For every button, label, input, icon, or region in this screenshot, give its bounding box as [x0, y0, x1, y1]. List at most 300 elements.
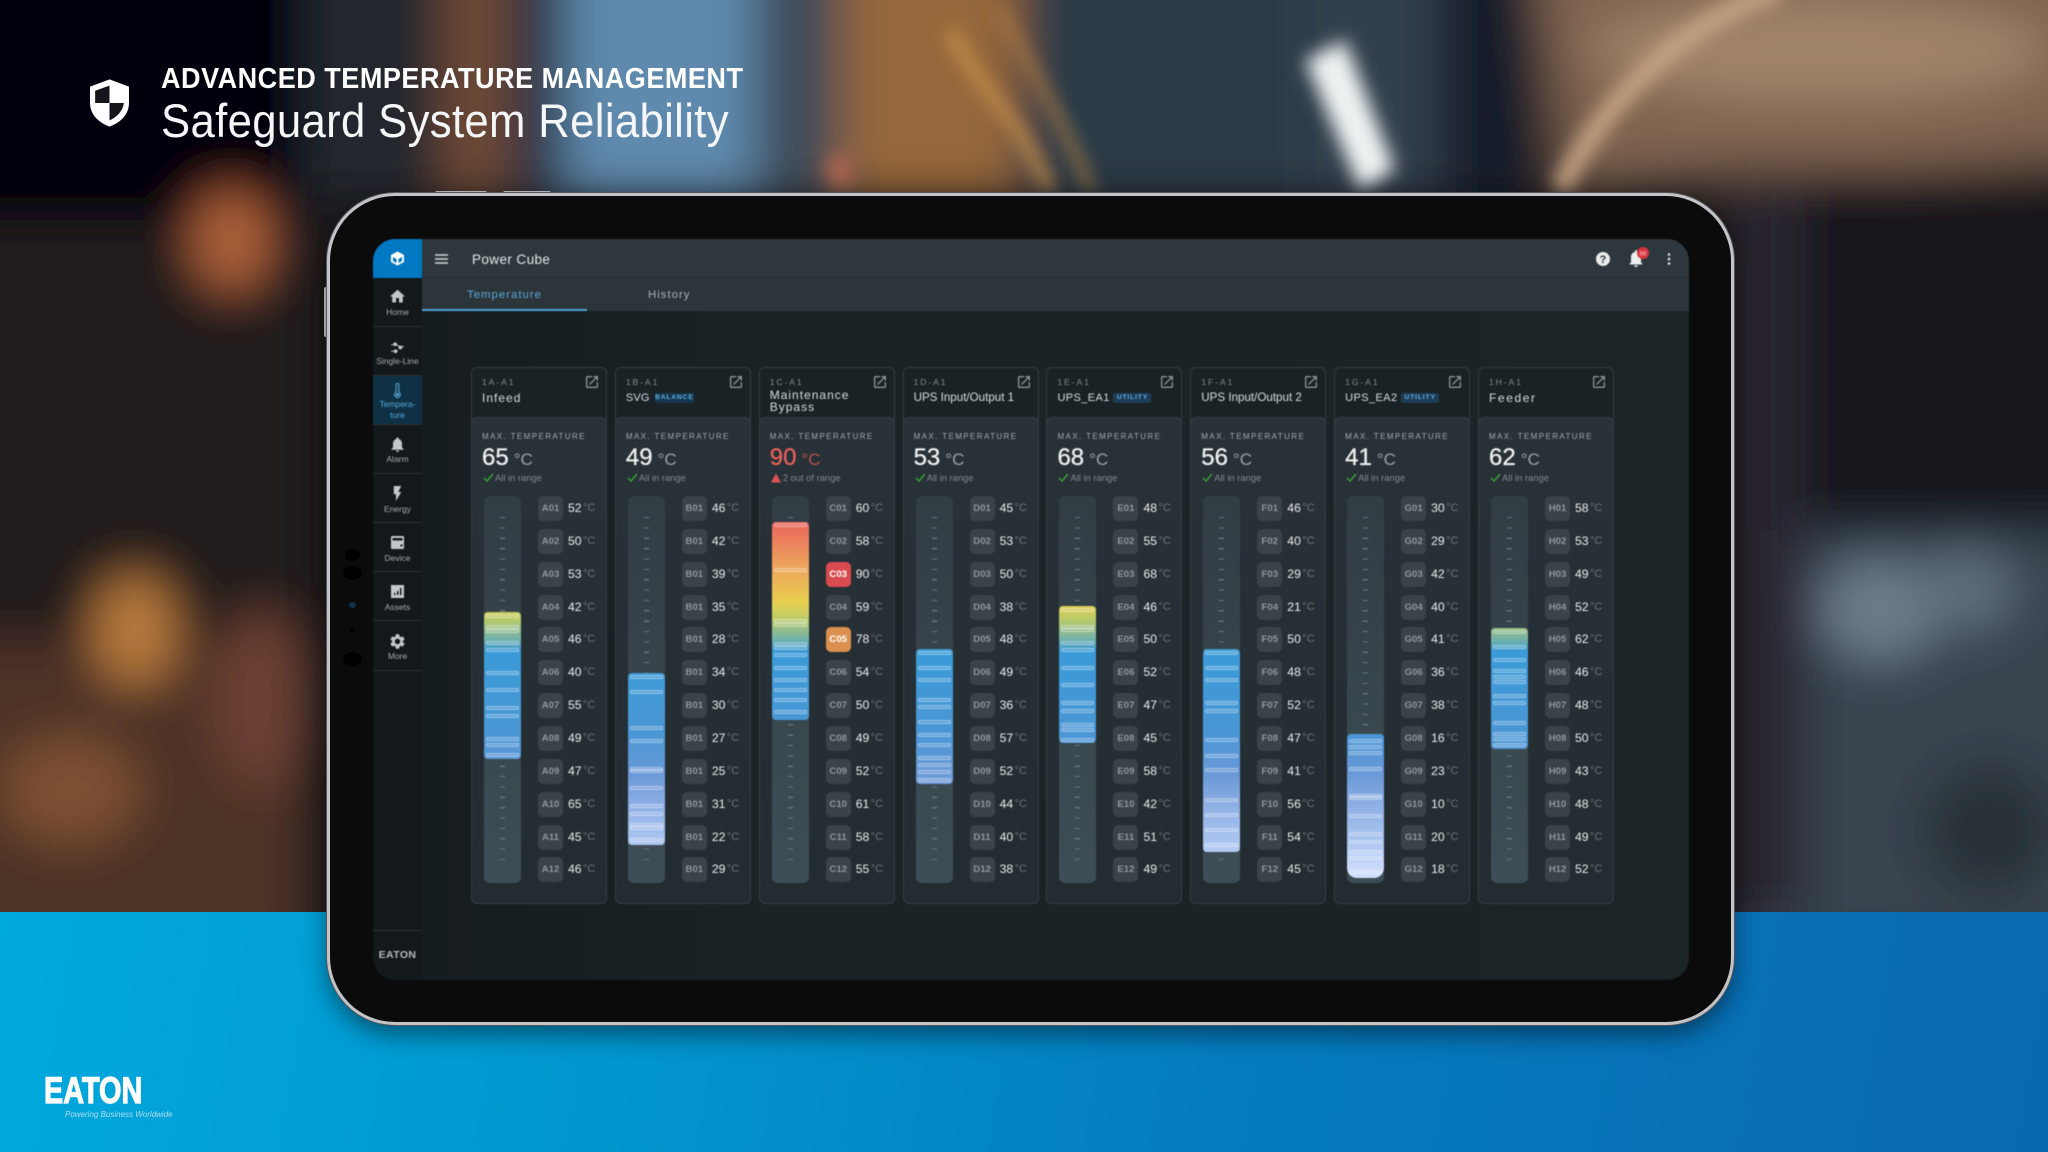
sensor list: E11 [1118, 832, 1134, 843]
sensor list: °C [727, 765, 739, 777]
temperature gauge [1059, 496, 1096, 883]
sensor list: 57 [1000, 731, 1013, 745]
sensor list: G10 [1405, 799, 1423, 810]
sensor list: 18 [1431, 862, 1445, 876]
sensor list: 48 [1575, 698, 1589, 712]
sensor list: H09 [1549, 766, 1566, 777]
sensor list: 61 [856, 797, 869, 811]
subtitle: Safeguard System Reliability [161, 94, 729, 147]
tagline: Powering Business Worldwide [65, 1110, 173, 1119]
icon: shield [90, 79, 129, 127]
card body [903, 417, 1039, 904]
sensor list: °C [1015, 798, 1027, 810]
sensor list: F06 [1262, 667, 1278, 678]
sensor list: 55 [568, 698, 582, 712]
sensor list: A11 [542, 832, 559, 843]
nav: device [373, 523, 422, 572]
sensor list: 41 [1287, 764, 1301, 778]
max temperature readout: 2 out of range [783, 472, 841, 483]
sensor list: °C [1015, 601, 1027, 613]
tab: history: History [648, 289, 690, 301]
sensor list: °C [871, 666, 883, 678]
card header: SVG [626, 392, 650, 404]
sensor list: °C [727, 502, 739, 514]
sensor list: 59 [856, 600, 869, 614]
sensor list: F05 [1262, 634, 1278, 645]
sensor list: °C [1446, 666, 1458, 678]
max temperature readout: All in range [927, 472, 973, 483]
sensor list: F12 [1262, 864, 1278, 875]
sensor list: °C [1590, 765, 1602, 777]
sensor list: A08 [542, 733, 559, 744]
sensor list: °C [1590, 732, 1602, 744]
sensor list: 46 [568, 862, 582, 876]
sensor list: °C [1446, 535, 1458, 547]
sensor list: A06 [542, 667, 559, 678]
sensor list: 45 [1143, 731, 1157, 745]
sensor list: 38 [1000, 600, 1013, 614]
sensor list: D07 [973, 700, 991, 711]
sensor list: °C [1015, 699, 1027, 711]
max temperature readout: 41 °C [1345, 444, 1396, 471]
icon: notifications [1629, 246, 1650, 268]
card body [759, 417, 895, 904]
sensor list: 36 [1000, 698, 1013, 712]
sensor list: 27 [712, 731, 725, 745]
nav: assets [373, 572, 422, 621]
sensor list: 30 [712, 698, 725, 712]
sensor list: 50 [1143, 632, 1157, 646]
sensor list: 36 [1431, 665, 1445, 679]
sensor list: 51 [1143, 830, 1157, 844]
sensor list: 50 [856, 698, 869, 712]
nav: home [373, 278, 422, 327]
sensor list: °C [1302, 765, 1315, 777]
tab: temperature: Temperature [467, 289, 542, 301]
max temperature readout: All in range [639, 472, 686, 483]
sensor list: °C [583, 666, 595, 678]
sensor list: °C [1015, 502, 1027, 514]
sensor list: °C [1158, 568, 1171, 580]
sensor list: °C [1302, 633, 1315, 645]
nav: alarm [373, 425, 422, 474]
sensor list: °C [1446, 732, 1458, 744]
panel: 1G-A1 UPS_EA2 [1334, 366, 1470, 904]
sensor list: °C [1302, 601, 1315, 613]
sensor list: °C [871, 798, 883, 810]
sensor list: °C [1302, 535, 1315, 547]
card header: Maintenance [770, 388, 849, 402]
sensor list: 46 [568, 632, 582, 646]
sensor list: C11 [830, 832, 847, 843]
sensor list: °C [583, 535, 595, 547]
sensor list: 58 [1143, 764, 1157, 778]
sensor list: °C [1015, 863, 1027, 875]
sensor list: E04 [1117, 602, 1134, 613]
panel: 1A-A1 Infeed [470, 366, 608, 904]
max temperature readout [482, 432, 586, 484]
sensor list: 50 [1287, 632, 1301, 646]
sensor list: A09 [542, 766, 559, 777]
sensor list: 60 [856, 501, 869, 515]
card header: Infeed [482, 391, 521, 405]
sensor list: °C [1590, 568, 1602, 580]
sensor list: 16 [1431, 731, 1445, 745]
sensor list: 58 [856, 830, 869, 844]
sensor list: 40 [1000, 830, 1013, 844]
app logo tile [373, 239, 422, 278]
sensor list: °C [871, 699, 883, 711]
nav: assets: Assets [385, 602, 410, 612]
nav: single-line: Single-Line [376, 356, 419, 366]
sensor list: °C [871, 732, 883, 744]
sensor list: 10 [1431, 797, 1445, 811]
sensor list: °C [1446, 831, 1458, 843]
card header: UPS Input/Output 1 [914, 391, 1014, 404]
sensor list: °C [583, 633, 595, 645]
max temperature readout: 56 °C [1201, 444, 1252, 471]
sensor list: 48 [1287, 665, 1301, 679]
sensor list: °C [727, 699, 739, 711]
max temperature readout: MAX. TEMPERATURE [1345, 432, 1449, 441]
sensor list: C02 [829, 536, 847, 547]
sensor list: 44 [1000, 797, 1013, 811]
sidebar [373, 239, 422, 980]
max temperature readout: All in range [1502, 472, 1549, 483]
sensor list: 34 [712, 665, 725, 679]
sensor list: °C [727, 666, 739, 678]
sensor list: D05 [973, 634, 991, 645]
max temperature readout: All in range [1070, 472, 1117, 483]
sensor list: D04 [973, 602, 991, 613]
logo wordmark: EATON [44, 1070, 142, 1111]
sensor list: 31 [712, 797, 725, 811]
sensor list: B01 [686, 766, 703, 777]
card header: 1H-A1 [1489, 377, 1523, 387]
sensor list: 50 [1000, 567, 1013, 581]
card body [615, 417, 751, 904]
sensor list: G04 [1405, 602, 1423, 613]
max temperature readout [770, 432, 874, 484]
sensor list: 49 [1000, 665, 1013, 679]
sensor list: E06 [1117, 667, 1134, 678]
sensor list: 25 [712, 764, 725, 778]
sensor list [1257, 496, 1315, 882]
sensor list: 52 [568, 501, 582, 515]
sensor list: 40 [1287, 534, 1301, 548]
temperature gauge [772, 496, 809, 883]
sensor list: G01 [1405, 503, 1423, 514]
sensor list: H03 [1549, 569, 1566, 580]
tablet bezel [327, 193, 1734, 1025]
icon: menu [434, 254, 449, 264]
card body [471, 417, 607, 904]
sensor list: 41 [1431, 632, 1445, 646]
sensor list: 58 [1575, 501, 1589, 515]
card header: UTILITY [1405, 394, 1436, 401]
sensor list: °C [1158, 633, 1171, 645]
max temperature readout [625, 432, 730, 484]
sensor list: 46 [712, 501, 725, 515]
sensor list: B01 [686, 700, 703, 711]
sensor list: 30 [1431, 501, 1445, 515]
card header [1478, 367, 1614, 427]
sensor list: °C [583, 798, 595, 810]
sensor list: °C [1158, 601, 1171, 613]
card header [1334, 367, 1470, 427]
sensor list: °C [727, 568, 739, 580]
sensor list: °C [1446, 699, 1458, 711]
sensor list: 42 [568, 600, 582, 614]
sensor list: °C [1302, 502, 1315, 514]
sensor list: 52 [1000, 764, 1013, 778]
card header [759, 367, 895, 427]
panel: 1E-A1 UPS_EA1 [1046, 366, 1182, 904]
sensor list: B01 [686, 503, 703, 514]
card header: 1E-A1 [1057, 377, 1091, 387]
sensor list: A10 [542, 799, 559, 810]
card header: 1A-A1 [482, 377, 515, 387]
card header: UPS_EA2 [1345, 392, 1397, 404]
max temperature readout: All in range [1358, 472, 1405, 483]
max temperature readout: MAX. TEMPERATURE [482, 432, 586, 441]
sensor list: °C [727, 601, 739, 613]
sensor list: 48 [1143, 501, 1157, 515]
panel: 1B-A1 SVG [614, 366, 752, 904]
sensor list: E12 [1117, 864, 1134, 875]
sensor list: °C [1590, 633, 1602, 645]
sensor list: D12 [973, 864, 991, 875]
sensor list: °C [1590, 798, 1602, 810]
sensor list: G03 [1405, 569, 1423, 580]
sensor list: E01 [1117, 503, 1134, 514]
sensor list: 28 [712, 632, 725, 646]
sensor list: D09 [973, 766, 991, 777]
sensor list: °C [1158, 798, 1171, 810]
sensor list [1401, 496, 1458, 882]
sensor list: 22 [712, 830, 725, 844]
sensor list: G08 [1405, 733, 1423, 744]
sensor list: °C [727, 863, 739, 875]
sensor list: °C [1302, 831, 1315, 843]
sensor list: D06 [973, 667, 991, 678]
card header: 1C-A1 [770, 377, 804, 387]
sensor list: C04 [829, 602, 847, 613]
sensor list: °C [583, 699, 595, 711]
sensor list: A05 [542, 634, 559, 645]
max temperature readout: 53 °C [914, 444, 964, 471]
sensor list: °C [1015, 666, 1027, 678]
sensor list: B01 [686, 569, 703, 580]
max temperature readout [914, 432, 1017, 484]
card body [1478, 417, 1614, 904]
sensor list: 50 [568, 534, 582, 548]
max temperature readout: 68 °C [1057, 444, 1108, 471]
sensor list: A12 [542, 864, 559, 875]
sensor list: F07 [1262, 700, 1278, 711]
sensor list: A01 [542, 503, 559, 514]
title: ADVANCED TEMPERATURE MANAGEMENT [161, 63, 743, 95]
sensor list: °C [871, 765, 883, 777]
max temperature readout: 90 °C [770, 444, 820, 471]
sensor list: H11 [1549, 832, 1566, 843]
sensor list: H02 [1549, 536, 1566, 547]
sensor list: 55 [856, 862, 869, 876]
sensor list: °C [871, 633, 883, 645]
sensor list: 53 [568, 567, 582, 581]
sensor list: °C [1446, 568, 1458, 580]
sensor list: E10 [1117, 799, 1134, 810]
card header: 1G-A1 [1345, 377, 1380, 387]
tablet device [311, 190, 1749, 1051]
blue footer band [0, 912, 2048, 1152]
max temperature readout: 49 °C [626, 444, 677, 471]
sensor list: G06 [1405, 667, 1423, 678]
card header: 1D-A1 [914, 377, 947, 387]
sensor list: 56 [1287, 797, 1301, 811]
sensor list: °C [583, 831, 595, 843]
sensor list: 68 [1143, 567, 1157, 581]
sensor list: °C [1015, 732, 1027, 744]
sensor list: 45 [1287, 862, 1301, 876]
sensor list: A04 [542, 602, 559, 613]
Eaton logo [44, 1070, 173, 1119]
max temperature readout [1201, 432, 1305, 484]
sensor list: °C [1158, 666, 1171, 678]
sensor list: °C [1158, 699, 1171, 711]
sensor list: °C [871, 502, 883, 514]
sensor list [538, 496, 595, 882]
sensor list: H01 [1549, 503, 1566, 514]
sensor list: H10 [1549, 799, 1566, 810]
sensor list: 49 [568, 731, 582, 745]
temperature gauge [628, 496, 665, 883]
sensor list: 42 [712, 534, 725, 548]
panel: 1C-A1 Maintenance Bypass [758, 366, 896, 904]
sensor list: 46 [1575, 665, 1589, 679]
sensor list: 47 [568, 764, 582, 778]
panel: 1D-A1 UPS Input/Output 1 [902, 366, 1040, 904]
sensor list [682, 496, 739, 882]
sensor list: B01 [686, 733, 703, 744]
sensor list: H06 [1549, 667, 1566, 678]
sensor list: D01 [973, 503, 991, 514]
card header: 1B-A1 [626, 377, 659, 387]
sensor list: °C [871, 863, 883, 875]
sensor list: 65 [568, 797, 582, 811]
max temperature readout: All in range [495, 472, 542, 483]
icon: help [1595, 251, 1611, 267]
sensor list: 49 [1575, 567, 1589, 581]
card header: UPS_EA1 [1057, 392, 1110, 404]
sensor list: E03 [1117, 569, 1134, 580]
sensor list: D03 [973, 569, 991, 580]
sensor list: 46 [1287, 501, 1301, 515]
sensor list: 48 [1000, 632, 1013, 646]
sensor list: D08 [973, 733, 991, 744]
sensor list: °C [1158, 535, 1171, 547]
sensor list: G11 [1405, 832, 1422, 843]
sensor list: °C [1590, 863, 1602, 875]
sensor list: G07 [1405, 700, 1423, 711]
sensor list: °C [583, 502, 595, 514]
sensor list [970, 496, 1027, 882]
max temperature readout: 62 °C [1489, 444, 1540, 471]
card header: UPS Input/Output 2 [1201, 391, 1302, 404]
sensor list: G02 [1405, 536, 1423, 547]
card body [1190, 417, 1326, 904]
nav: more [373, 621, 422, 671]
sensor list: 45 [1000, 501, 1013, 515]
sensor list: H12 [1549, 864, 1566, 875]
sensor list: °C [1302, 732, 1315, 744]
icon: notifications: 88 [1640, 251, 1647, 257]
sensor list: °C [727, 732, 739, 744]
sensor list: °C [1158, 765, 1171, 777]
sensor list: °C [1590, 666, 1602, 678]
sensor list: A02 [542, 536, 559, 547]
max temperature readout: MAX. TEMPERATURE [1489, 432, 1593, 441]
sensor list: C05 [829, 634, 847, 645]
sensor list: °C [1302, 666, 1315, 678]
sensor list: °C [1446, 863, 1458, 875]
tab bar [422, 278, 1689, 311]
sidebar Eaton logo: EATON [379, 949, 416, 961]
max temperature readout: MAX. TEMPERATURE [770, 432, 874, 441]
sensor list: B01 [686, 602, 703, 613]
app title: Power Cube [472, 252, 550, 267]
sensor list: 39 [712, 567, 725, 581]
sensor list: °C [1158, 831, 1171, 843]
sensor list: 52 [1143, 665, 1157, 679]
sensor list: °C [1302, 568, 1315, 580]
sensor list: °C [1015, 765, 1027, 777]
nav: device: Device [384, 553, 410, 563]
camera array [343, 549, 362, 666]
card header [903, 367, 1039, 427]
nav: more: More [388, 651, 407, 661]
sensor list: E07 [1117, 700, 1134, 711]
sensor list: 47 [1287, 731, 1301, 745]
sensor list: °C [1015, 568, 1027, 580]
max temperature readout: 65 °C [482, 444, 533, 471]
sensor list: 35 [712, 600, 725, 614]
sensor list: 54 [856, 665, 869, 679]
sensor list: °C [583, 732, 595, 744]
sensor list: 50 [1575, 731, 1589, 745]
sensor list: H08 [1549, 733, 1566, 744]
top bar [422, 239, 1689, 278]
sensor list: H05 [1549, 634, 1566, 645]
icon: overflow menu [1667, 252, 1671, 266]
sensor list: 40 [1431, 600, 1445, 614]
sensor list: C08 [829, 733, 847, 744]
sensor list: B01 [686, 634, 703, 645]
temperature gauge [1347, 496, 1384, 883]
sensor list: F04 [1262, 602, 1278, 613]
sensor list: 49 [1575, 830, 1589, 844]
sensor list: A07 [542, 700, 559, 711]
sensor list: 46 [1143, 600, 1157, 614]
sensor list: °C [1446, 601, 1458, 613]
sensor list: °C [871, 535, 883, 547]
card header: 1F-A1 [1201, 377, 1234, 387]
card body [1334, 417, 1470, 904]
sensor list: °C [1158, 863, 1171, 875]
sensor list: E05 [1117, 634, 1134, 645]
max temperature readout: MAX. TEMPERATURE [1057, 432, 1161, 441]
sensor list: 52 [1575, 862, 1589, 876]
